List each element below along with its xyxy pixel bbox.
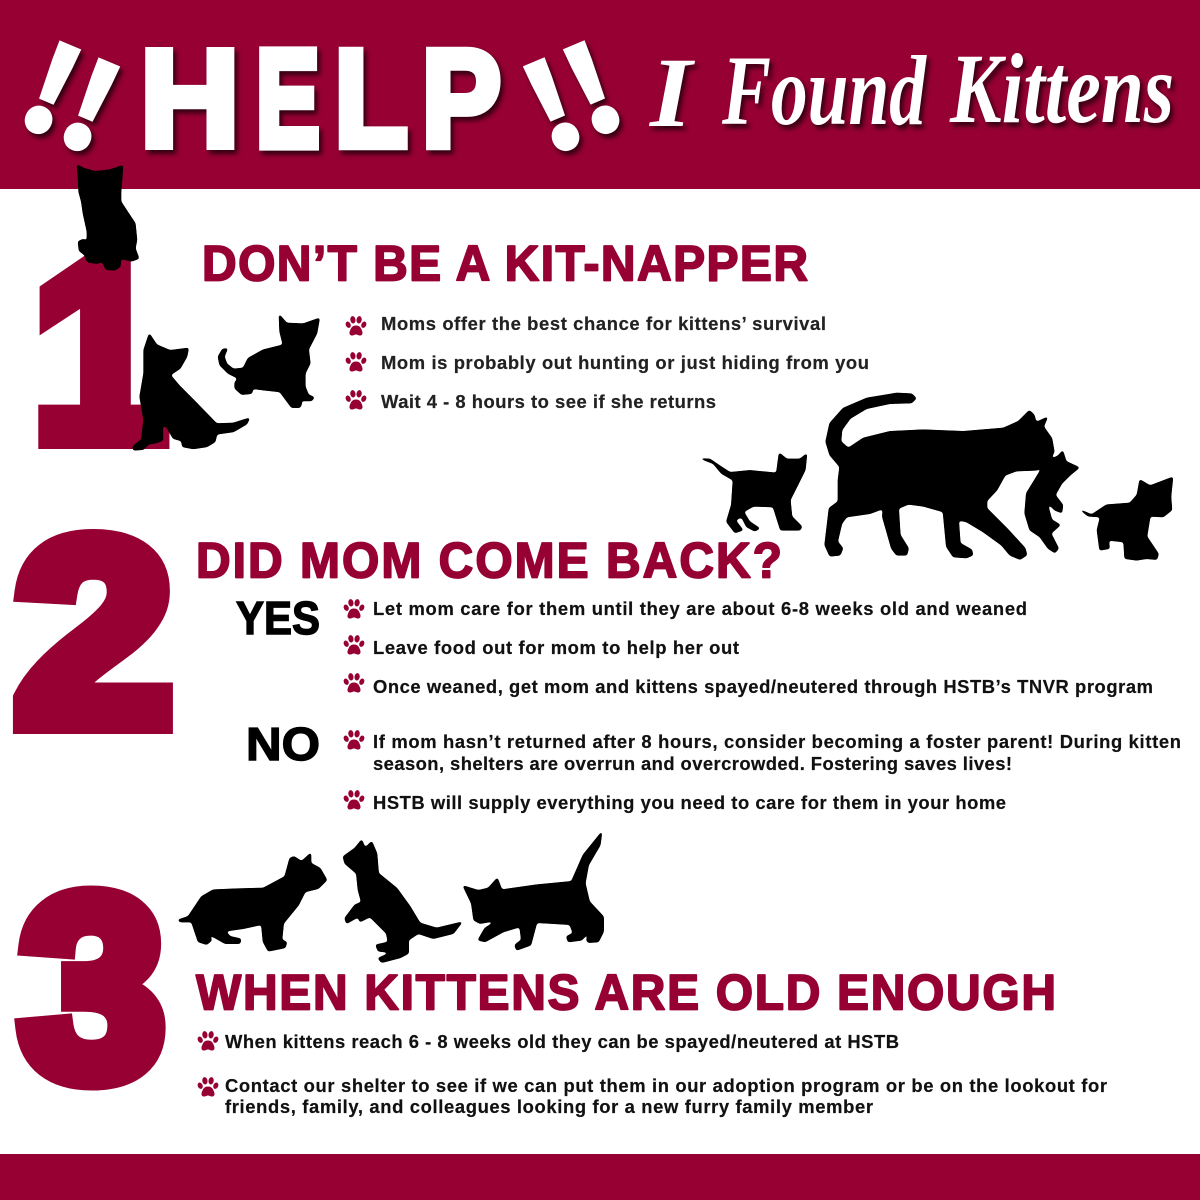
icon: paw xyxy=(197,1077,219,1097)
icon: kitten sitting on numeral 1 xyxy=(77,165,139,270)
exclamation marks: right xyxy=(494,0,646,189)
heading: don't be a kit-napper: DON’T BE A KIT-NAPPER xyxy=(202,237,808,292)
title: HELP: E xyxy=(256,23,320,176)
icon: kitten looking up xyxy=(133,334,249,450)
icon: standing kitten xyxy=(701,453,807,533)
icon: kitten rearing up xyxy=(343,840,462,962)
icon: paw xyxy=(345,316,367,336)
numeral 3: 3 xyxy=(20,843,164,1132)
title: HELP: P xyxy=(422,22,501,176)
icon: paw xyxy=(343,635,365,655)
icon: paw xyxy=(343,673,365,693)
bullet text: If mom hasn’t returned after 8 hours, consider becoming a foster parent! During kitten xyxy=(373,731,1181,752)
bullet text: HSTB will supply everything you need to care for them in your home xyxy=(373,792,1006,813)
bullet text: Leave food out for mom to help her out xyxy=(373,637,739,658)
title: I Found Kittens xyxy=(649,33,1174,148)
icon: kitten crouching xyxy=(218,315,319,407)
bullet text: Wait 4 - 8 hours to see if she returns xyxy=(381,391,716,412)
bullet text: Mom is probably out hunting or just hiding from you xyxy=(381,352,869,373)
icon: paw xyxy=(197,1031,219,1051)
icon: mother cat carrying kitten xyxy=(825,393,1079,559)
bullet text continued: season, shelters are overrun and overcrowded. Fostering saves lives! xyxy=(373,753,1012,774)
title: HELP: L xyxy=(334,22,408,176)
heading: when kittens are old enough: WHEN KITTENS ARE OLD ENOUGH xyxy=(196,966,1056,1021)
label: no: NO xyxy=(246,718,320,770)
label: yes: YES xyxy=(236,592,320,644)
exclamation marks: right: ! xyxy=(494,10,606,189)
title: HELP xyxy=(140,22,501,176)
icon: paw xyxy=(343,599,365,619)
icon: paw xyxy=(343,730,365,750)
bullet text continued: friends, family, and colleagues looking for a new furry family member xyxy=(225,1096,873,1117)
exclamation marks: left: ! xyxy=(37,10,149,189)
title: HELP: H xyxy=(140,22,240,176)
icon: kitten with raised tail xyxy=(463,832,603,950)
icon: kitten walking right xyxy=(178,853,327,951)
title: I Found Kittens: I xyxy=(649,37,695,148)
icon: paw xyxy=(345,352,367,372)
bullet text: When kittens reach 6 - 8 weeks old they can be spayed/neutered at HSTB xyxy=(225,1031,899,1052)
list: section 1 bullets xyxy=(345,313,869,412)
header band xyxy=(0,0,1200,189)
bullet text: Let mom care for them until they are about 6-8 weeks old and weaned xyxy=(373,598,1027,619)
icon: paw xyxy=(343,790,365,810)
bullet text: Once weaned, get mom and kittens spayed/neutered through HSTB’s TNVR program xyxy=(373,676,1153,697)
numeral 2: 2 xyxy=(15,486,172,779)
bullet text: Moms offer the best chance for kittens’ survival xyxy=(381,313,826,334)
icon: small kitten right xyxy=(1081,477,1173,560)
title: I Found Kittens: Found xyxy=(721,35,927,146)
list: yes bullets xyxy=(343,598,1153,697)
heading: did mom come back: DID MOM COME BACK? xyxy=(196,534,782,589)
list: no bullets xyxy=(343,730,1181,813)
numeral 1: 1 xyxy=(31,207,168,495)
bullet text: Contact our shelter to see if we can put them in our adoption program or be on the lookout for xyxy=(225,1075,1107,1096)
list: section 3 bullets xyxy=(197,1031,1107,1117)
icon: paw xyxy=(345,390,367,410)
footer band xyxy=(0,1154,1200,1200)
